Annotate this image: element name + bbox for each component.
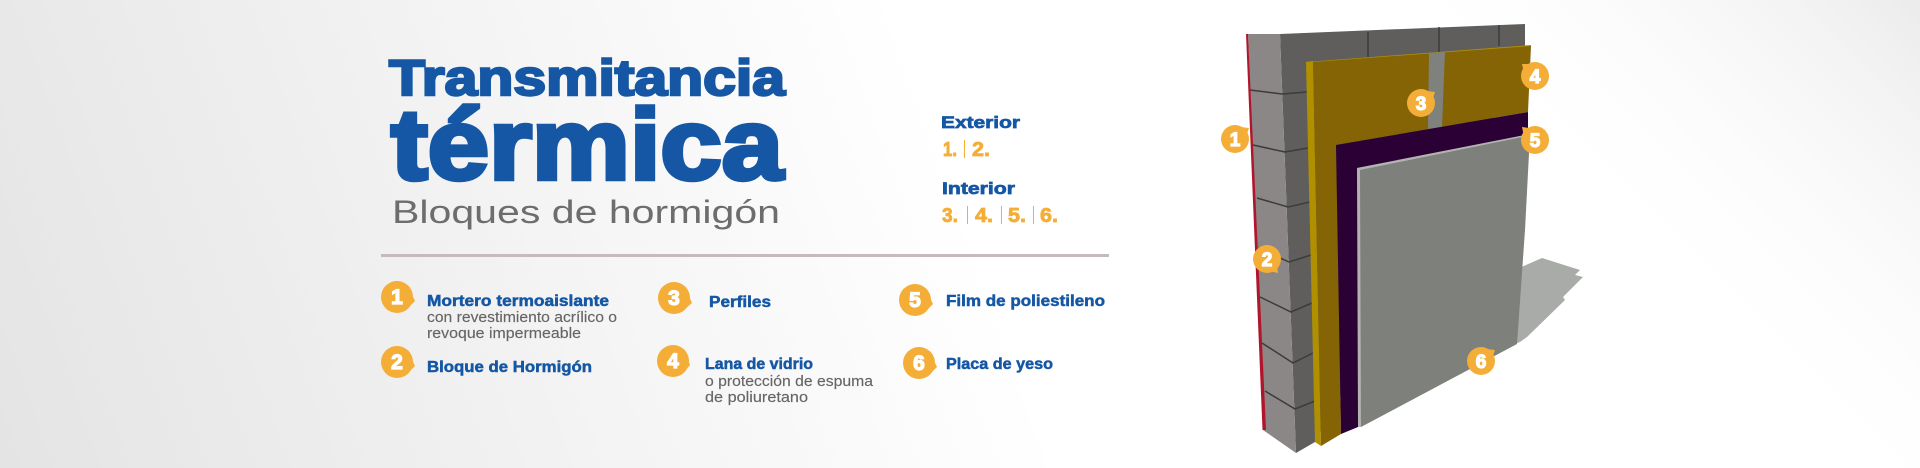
- shadow: [1510, 258, 1583, 346]
- badge 4: [1521, 62, 1549, 90]
- legend item 3: Perfiles: [709, 294, 771, 311]
- exterior / interior key: Exterior: [941, 113, 1020, 132]
- title: Transmitancia: [389, 50, 786, 106]
- concrete block wall: [1248, 24, 1525, 453]
- badge 5: [1521, 126, 1549, 154]
- badge 1: [1221, 125, 1249, 153]
- exterior / interior key: 2.: [972, 139, 990, 161]
- legend item 4: de poliuretano: [705, 390, 808, 406]
- gypsum board: [1357, 134, 1530, 427]
- exterior / interior key: 1.: [943, 139, 957, 161]
- exterior / interior key: 4.: [975, 205, 993, 227]
- badge 2: [1253, 245, 1281, 273]
- polyethylene film: [1336, 112, 1528, 434]
- badge 2: 2: [1262, 250, 1272, 271]
- legend item 4: Lana de vidrio: [705, 356, 813, 373]
- badge 3: 3: [1416, 94, 1426, 115]
- badge 6: 6: [1476, 352, 1486, 373]
- title: térmica: [391, 89, 785, 201]
- red mortar layer: [1246, 34, 1266, 430]
- legend item 3: 3: [668, 287, 680, 310]
- legend item 2: 2: [391, 351, 403, 374]
- legend item 3: [658, 282, 771, 314]
- legend item 2: [381, 346, 592, 378]
- legend item 6: Placa de yeso: [946, 356, 1053, 373]
- exterior / interior key: 3.: [942, 205, 958, 227]
- legend item 5: [899, 284, 1105, 316]
- legend item 1: revoque impermeable: [427, 326, 581, 342]
- legend item 6: [903, 347, 1053, 379]
- badge 3: [1407, 89, 1435, 117]
- exterior / interior key: [941, 113, 1058, 227]
- legend item 4: 4: [667, 350, 679, 373]
- exterior / interior key: Interior: [942, 179, 1015, 198]
- legend item 4: [657, 345, 874, 406]
- legend item 6: 6: [913, 352, 925, 375]
- legend item 4: o protección de espuma: [705, 374, 874, 390]
- badge 1: 1: [1230, 130, 1241, 151]
- legend item 2: Bloque de Hormigón: [427, 359, 592, 376]
- glass wool insulation: [1306, 45, 1531, 446]
- badge 5: 5: [1530, 131, 1541, 152]
- legend item 1: Mortero termoaislante: [427, 293, 609, 310]
- legend item 5: 5: [909, 289, 921, 312]
- badge 6: [1467, 347, 1495, 375]
- wall diagram: [1246, 24, 1583, 453]
- legend item 1: 1: [391, 286, 403, 309]
- legend item 1: con revestimiento acrílico o: [427, 310, 617, 326]
- exterior / interior key: 5.: [1008, 205, 1026, 227]
- legend item 1: [381, 281, 617, 342]
- exterior / interior key: 6.: [1040, 205, 1058, 227]
- metal profile: [1428, 52, 1445, 129]
- legend item 5: Film de poliestileno: [946, 293, 1105, 310]
- title: [389, 50, 786, 201]
- subtitle: Bloques de hormigón: [392, 194, 780, 230]
- badge 4: 4: [1530, 67, 1541, 88]
